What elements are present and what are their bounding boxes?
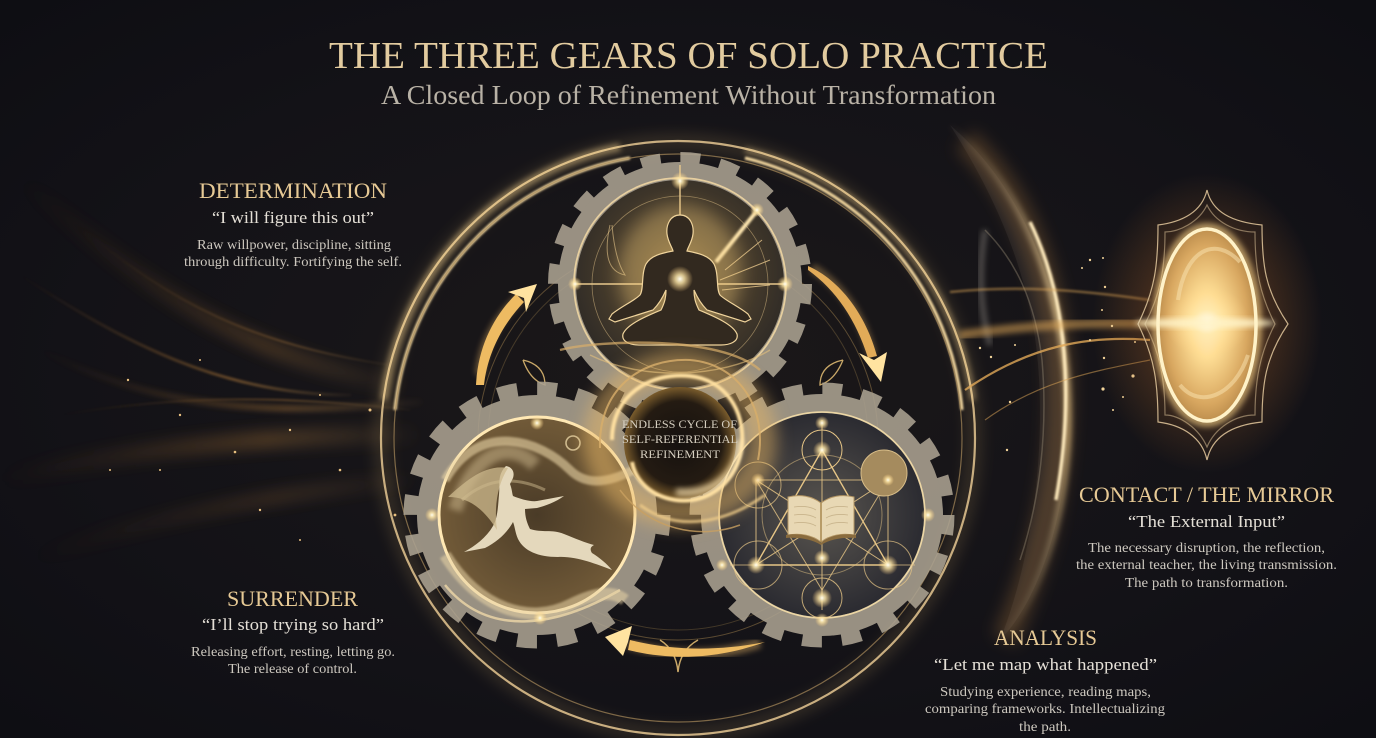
subtitle: A Closed Loop of Refinement Without Transformation bbox=[381, 80, 997, 110]
arrow: surrender to determination bbox=[476, 284, 537, 385]
particles: right bbox=[979, 257, 1136, 451]
gear body bbox=[413, 391, 661, 639]
text block: determination: DETERMINATION bbox=[199, 178, 387, 203]
text block: analysis: ANALYSIS bbox=[994, 625, 1097, 650]
text block: surrender: “I’ll stop trying so hard” bbox=[202, 615, 384, 634]
outer ring bbox=[381, 141, 975, 735]
inner swirls bbox=[1178, 249, 1248, 397]
text block: surrender: SURRENDER bbox=[227, 586, 358, 611]
text block: analysis: comparing frameworks. Intellectualizing bbox=[925, 701, 1165, 716]
sparkles bbox=[716, 416, 935, 627]
chest light bbox=[667, 266, 693, 292]
gear: determination bbox=[557, 161, 803, 407]
light flare bbox=[1165, 286, 1249, 358]
halo bbox=[618, 204, 742, 340]
text block: contact / the mirror: the external teacher, the living transmission. bbox=[1076, 557, 1337, 572]
text block: analysis: “Let me map what happened” bbox=[934, 655, 1157, 674]
arrow: analysis to surrender bbox=[605, 626, 765, 657]
center label: ENDLESS CYCLE OF bbox=[622, 417, 737, 431]
particles: left bbox=[109, 359, 396, 541]
central vortex bbox=[560, 343, 770, 532]
mirror surface bbox=[1158, 229, 1256, 421]
mirror rim bbox=[1158, 229, 1256, 421]
text block: analysis: the path. bbox=[1019, 719, 1071, 734]
title: THE THREE GEARS OF SOLO PRACTICE bbox=[329, 35, 1048, 77]
text block: determination: through difficulty. Fortifying the self. bbox=[184, 254, 402, 269]
text block: analysis bbox=[925, 625, 1165, 734]
text block: determination: “I will figure this out” bbox=[212, 208, 374, 227]
text block: surrender: The release of control. bbox=[228, 661, 357, 676]
beam to mirror bbox=[950, 289, 1160, 420]
ornate frame bbox=[1138, 190, 1288, 460]
the mirror bbox=[1092, 173, 1322, 473]
text block: contact / the mirror: CONTACT / THE MIRROR bbox=[1079, 482, 1334, 507]
sparkles bbox=[568, 172, 793, 292]
glass sphere arc bbox=[950, 125, 1068, 640]
text block: contact / the mirror bbox=[1076, 482, 1337, 590]
gear: surrender bbox=[413, 391, 661, 639]
gear face bbox=[576, 180, 784, 388]
light streams: left bbox=[0, 180, 420, 560]
globe bbox=[861, 450, 907, 496]
arrow: determination to analysis bbox=[808, 266, 887, 382]
ring and rays bbox=[574, 165, 786, 390]
text block: determination bbox=[184, 178, 402, 269]
text block: determination: Raw willpower, discipline, sitting bbox=[197, 237, 391, 252]
center label: REFINEMENT bbox=[640, 447, 721, 461]
center label bbox=[622, 417, 738, 461]
text block: surrender bbox=[191, 586, 395, 676]
mirror glow bbox=[1092, 173, 1322, 473]
rim glow bbox=[1157, 228, 1257, 422]
center label: SELF-REFERENTIAL bbox=[622, 432, 738, 446]
floating woman bbox=[464, 466, 612, 570]
meditating figure bbox=[609, 215, 751, 345]
open book bbox=[786, 496, 856, 545]
text block: surrender: Releasing effort, resting, letting go. bbox=[191, 644, 395, 659]
text block: contact / the mirror: The necessary disruption, the reflection, bbox=[1088, 540, 1325, 555]
gear body bbox=[699, 392, 945, 638]
sacred geometry bbox=[719, 412, 925, 618]
hair bbox=[448, 467, 508, 530]
horizontal flare bbox=[1135, 318, 1275, 328]
gear body bbox=[557, 161, 803, 407]
gear face bbox=[440, 418, 634, 612]
text block: contact / the mirror: “The External Input” bbox=[1128, 512, 1285, 531]
gear face bbox=[720, 413, 924, 617]
text block: contact / the mirror: The path to transformation. bbox=[1125, 575, 1288, 590]
gear: analysis bbox=[699, 392, 945, 638]
flowing waves bbox=[439, 417, 650, 621]
text block: analysis: Studying experience, reading maps, bbox=[940, 684, 1151, 699]
sparkles bbox=[425, 416, 547, 625]
